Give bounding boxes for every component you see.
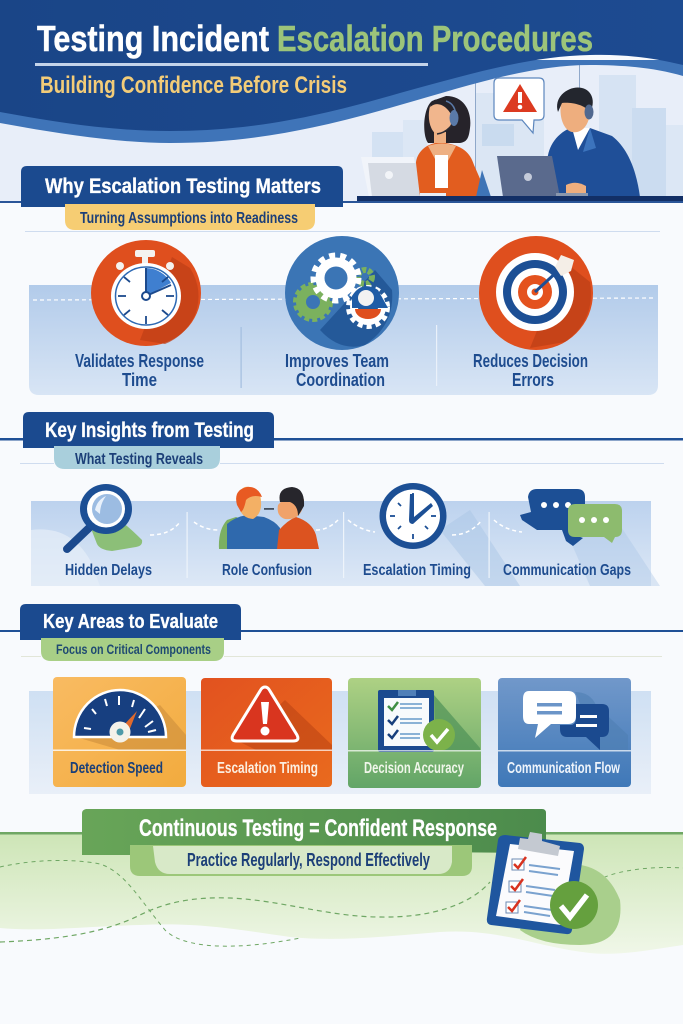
- illustration: laptop left: [361, 157, 446, 197]
- title: Testing Incident: [37, 18, 269, 59]
- panel: key insights: [31, 501, 660, 586]
- label: validates response time: [75, 351, 204, 390]
- closing banner: Continuous Testing = Confident Response: [139, 815, 497, 842]
- card: decision accuracy: Decision Accuracy: [364, 760, 464, 777]
- subheading pill: turning assumptions: [65, 204, 315, 230]
- title underline: [35, 63, 428, 66]
- header backdrop: [0, 60, 683, 202]
- card: communication flow: Communication Flow: [507, 760, 620, 777]
- card: escalation timing: Escalation Timing: [217, 760, 318, 777]
- subtitle: Building Confidence Before Crisis: [40, 72, 347, 99]
- label: reduces decision errors: [473, 351, 588, 390]
- title: Escalation Procedures: [277, 18, 593, 59]
- label: reduces decision errors: Errors: [512, 370, 554, 390]
- subheading pill: what testing reveals: [54, 446, 220, 469]
- illustration: desk: [357, 196, 683, 203]
- icon: target: [479, 236, 593, 350]
- subheading pill: turning assumptions: Turning Assumptions into Readiness: [80, 210, 298, 227]
- card: detection speed: [53, 677, 186, 787]
- icon: chat bubbles: [520, 489, 622, 546]
- icon: gears: [285, 236, 399, 350]
- illustration: alert speech bubble: [494, 78, 544, 133]
- label: role confusion: Role Confusion: [222, 562, 312, 579]
- closing subheading pill: Practice Regularly, Respond Effectively: [187, 850, 430, 870]
- illustration: woman with headset: [414, 96, 491, 197]
- label: hidden delays: Hidden Delays: [65, 562, 152, 579]
- icon: wall clock: [380, 483, 446, 549]
- section heading: key areas: [0, 604, 683, 640]
- closing subheading pill: [130, 845, 472, 876]
- panel: key areas backdrop: [29, 691, 651, 794]
- closing green wave: [0, 832, 683, 954]
- label: validates response time: Time: [122, 370, 157, 390]
- card: decision accuracy: [348, 678, 481, 788]
- label: communication gaps: Communication Gaps: [503, 562, 631, 579]
- icon: clipboard with checkmark: [487, 832, 598, 934]
- section heading: key insights: Key Insights from Testing: [45, 419, 254, 442]
- subheading pill: focus on critical components: Focus on Critical Components: [56, 641, 211, 657]
- section heading: key insights: [0, 412, 683, 448]
- icon: stopwatch: [91, 240, 201, 346]
- label: validates response time: Validates Response: [75, 351, 204, 371]
- dark banner: [0, 0, 683, 131]
- panel: why testing matters: [29, 285, 658, 395]
- card: communication flow: [498, 678, 631, 787]
- label: improves team coordination: Coordination: [296, 370, 385, 390]
- label: improves team coordination: [285, 351, 389, 390]
- section heading: why escalation testing matters: Why Escalation Testing Matters: [45, 175, 321, 198]
- section heading: key areas: Key Areas to Evaluate: [43, 611, 218, 633]
- closing banner: [82, 809, 546, 855]
- section heading: why escalation testing matters: [0, 166, 683, 207]
- label: reduces decision errors: Reduces Decision: [473, 351, 588, 371]
- label: escalation timing: Escalation Timing: [363, 562, 471, 579]
- illustration: laptop right: [497, 156, 588, 197]
- subheading pill: what testing reveals: What Testing Reveals: [75, 451, 203, 468]
- label: improves team coordination: Improves Team: [285, 351, 389, 371]
- card: escalation timing: [201, 678, 332, 787]
- icon: magnifier: [67, 484, 142, 551]
- title: [37, 18, 593, 59]
- card: detection speed: Detection Speed: [70, 760, 163, 777]
- illustration: man with headset: [547, 88, 640, 197]
- header banner: [0, 0, 683, 143]
- subheading pill: focus on critical components: [41, 638, 224, 661]
- illustration: city skyline backdrop: [372, 65, 683, 196]
- icon: two people: [219, 487, 319, 549]
- wave band: [0, 60, 683, 143]
